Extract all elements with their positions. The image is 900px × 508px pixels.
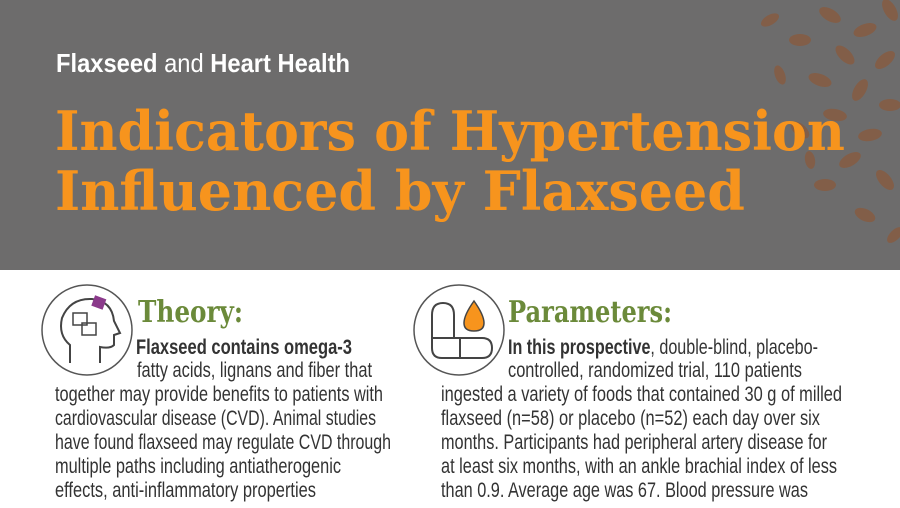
text: parameters: controlled, randomized trial, 110 patients: [508, 359, 802, 382]
text: theory: fatty acids, lignans and fiber that: [137, 359, 372, 382]
subtitle: Flaxseed and Heart Health: [56, 48, 350, 78]
heading: parameters: Parameters:: [508, 295, 672, 330]
heading: theory: Theory:: [138, 295, 243, 330]
text: theory: have found flaxseed may regulate CVD through: [55, 431, 391, 454]
text: theory: multiple paths including antiatherogenic: [55, 455, 341, 478]
text: theory: cardiovascular disease (CVD). Animal studies: [55, 407, 376, 430]
panel: parameters: [414, 285, 842, 502]
text: theory: together may provide benefits to patients with: [55, 383, 383, 406]
panel: theory: [42, 285, 391, 502]
text: theory: effects, anti-inflammatory properties: [55, 479, 316, 502]
header banner: [0, 0, 900, 270]
title: Indicators of Hypertension: [55, 99, 845, 163]
seeds decoration: [759, 0, 900, 246]
title: [55, 99, 845, 223]
icon: pills and drop: [414, 285, 504, 375]
title: Influenced by Flaxseed: [55, 159, 745, 223]
text: parameters: In this prospective, double-blind, placebo-: [508, 336, 818, 359]
icon: head with puzzle: [42, 285, 132, 375]
text: theory: [55, 336, 391, 502]
text: parameters: [441, 336, 842, 502]
text: theory: Flaxseed contains omega-3: [136, 336, 352, 359]
